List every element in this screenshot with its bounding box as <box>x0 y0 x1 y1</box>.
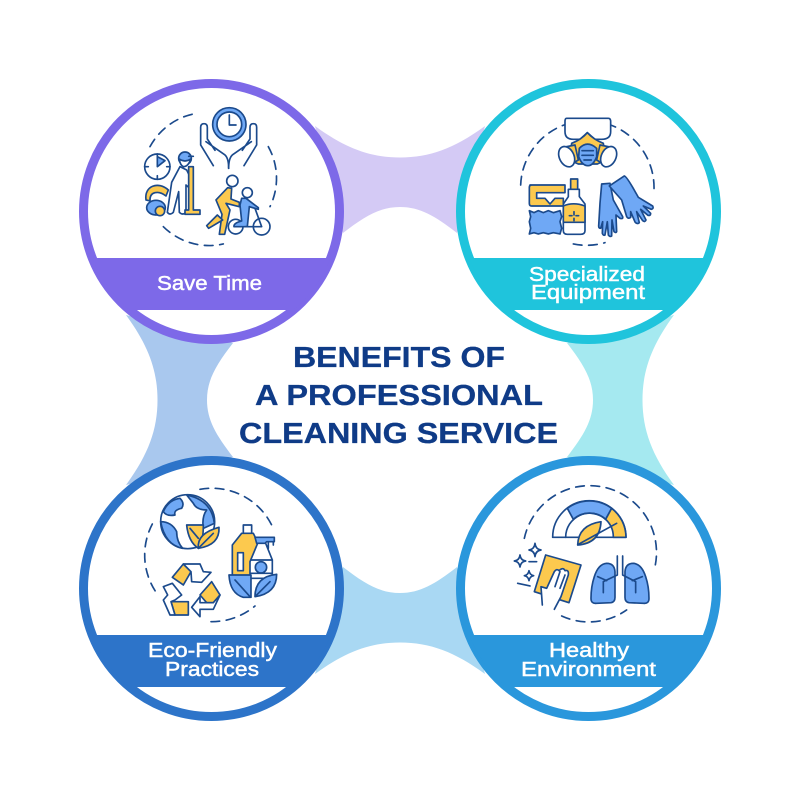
label band: Eco-Friendly Practices <box>97 635 326 687</box>
connector: bottom <box>315 567 485 674</box>
panel: Save Time <box>79 84 344 340</box>
panel: Healthy Environment <box>456 460 721 716</box>
label: Environment: Environment <box>521 659 657 681</box>
label: Equipment: Equipment <box>531 282 646 304</box>
label: Specialized: Specialized <box>529 264 645 286</box>
label: Eco-Friendly: Eco-Friendly <box>148 640 277 662</box>
label band: Specialized Equipment <box>474 258 703 310</box>
icon: specialized equipment <box>521 118 654 245</box>
title: CLEANING SERVICE <box>239 418 558 450</box>
panel: Eco-Friendly Practices <box>79 460 344 716</box>
label: Practices: Practices <box>165 659 259 681</box>
icon: healthy environment <box>514 486 657 622</box>
label: Healthy: Healthy <box>549 640 629 662</box>
title <box>239 342 558 450</box>
panel: Specialized Equipment <box>456 84 721 340</box>
connector: top <box>315 126 485 233</box>
label: Save Time: Save Time <box>157 273 262 295</box>
label band: Healthy Environment <box>474 635 703 687</box>
label band: Save Time <box>97 258 326 310</box>
connector: left <box>126 315 233 485</box>
connector: right <box>567 315 674 485</box>
icon: eco-friendly practices <box>145 488 277 622</box>
title: BENEFITS OF <box>293 342 505 374</box>
title: A PROFESSIONAL <box>255 380 543 412</box>
icon: save time <box>145 108 277 246</box>
